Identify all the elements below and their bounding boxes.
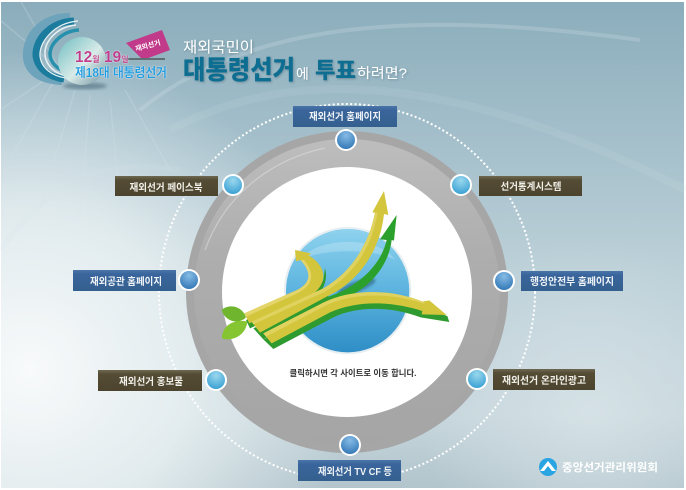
icon: pink ballot: 재외선거: [134, 38, 161, 53]
logo: 18th presidential election emblem: [28, 18, 170, 90]
title: 에: [296, 66, 309, 82]
title: 하려면?: [357, 65, 407, 81]
label: election homepage: [293, 106, 397, 127]
globe body: [58, 37, 106, 85]
arrow: yellow tall: [252, 191, 388, 339]
caption: click to move: 클릭하시면 각 사이트로 이동 합니다.: [290, 367, 416, 378]
icon: green leaves: [222, 306, 247, 339]
label: ministry homepage: [521, 271, 623, 291]
arrow: green tall behind: [327, 215, 397, 302]
label: mission homepage: 재외공관 홈페이지: [90, 275, 162, 288]
label: facebook: [115, 176, 218, 196]
label: promo materials: 재외선거 홍보물: [119, 375, 183, 388]
dotted orbit circle: [159, 104, 535, 480]
icon: globe shadow: [63, 82, 107, 90]
label: ministry homepage: 행정안전부 홈페이지: [530, 275, 614, 288]
gray ring: [186, 131, 508, 453]
node: ministry: [493, 270, 515, 292]
label: election statistics system: [479, 176, 582, 196]
icon: pink ballot: [125, 30, 170, 60]
icon: blue sphere: [284, 227, 411, 354]
footer logo: National Election Commission: [539, 458, 658, 476]
node: TV CF: [339, 434, 361, 456]
label: promo materials: [98, 370, 202, 391]
node: promo: [205, 369, 227, 391]
icon: blue swoosh arcs: [28, 18, 79, 80]
label: mission homepage: [73, 270, 176, 291]
node: online ads: [466, 368, 488, 390]
title: 재외국민이: [183, 39, 254, 56]
label: election homepage: 재외선거 홈페이지: [309, 110, 381, 123]
node: facebook: [222, 174, 244, 196]
node: top: [335, 129, 357, 151]
title: 투표: [315, 58, 356, 83]
node: statistics: [450, 174, 472, 196]
footer logo: National Election Commission: 중앙선거관리위원회: [562, 460, 658, 474]
label: election statistics system: 선거통계시스템: [500, 180, 562, 193]
title: [183, 39, 407, 85]
arrow: short curled: [244, 250, 326, 328]
election name: 제18대 대통령선거: [75, 65, 167, 80]
label: TV CF: [298, 460, 401, 481]
label: TV CF: 재외선거 TV CF 등: [318, 465, 392, 478]
label: facebook: 재외선거 페이스북: [130, 181, 202, 194]
label: online ads: 재외선거 온라인광고: [502, 374, 586, 387]
title: 대통령선거: [183, 55, 295, 85]
election date: 12월 19일: [75, 49, 129, 66]
label: online ads: [493, 369, 595, 390]
central illustration: arrows on blue sphere: [222, 191, 449, 354]
arrow: right curving: [263, 292, 449, 349]
node: mission: [178, 269, 200, 291]
